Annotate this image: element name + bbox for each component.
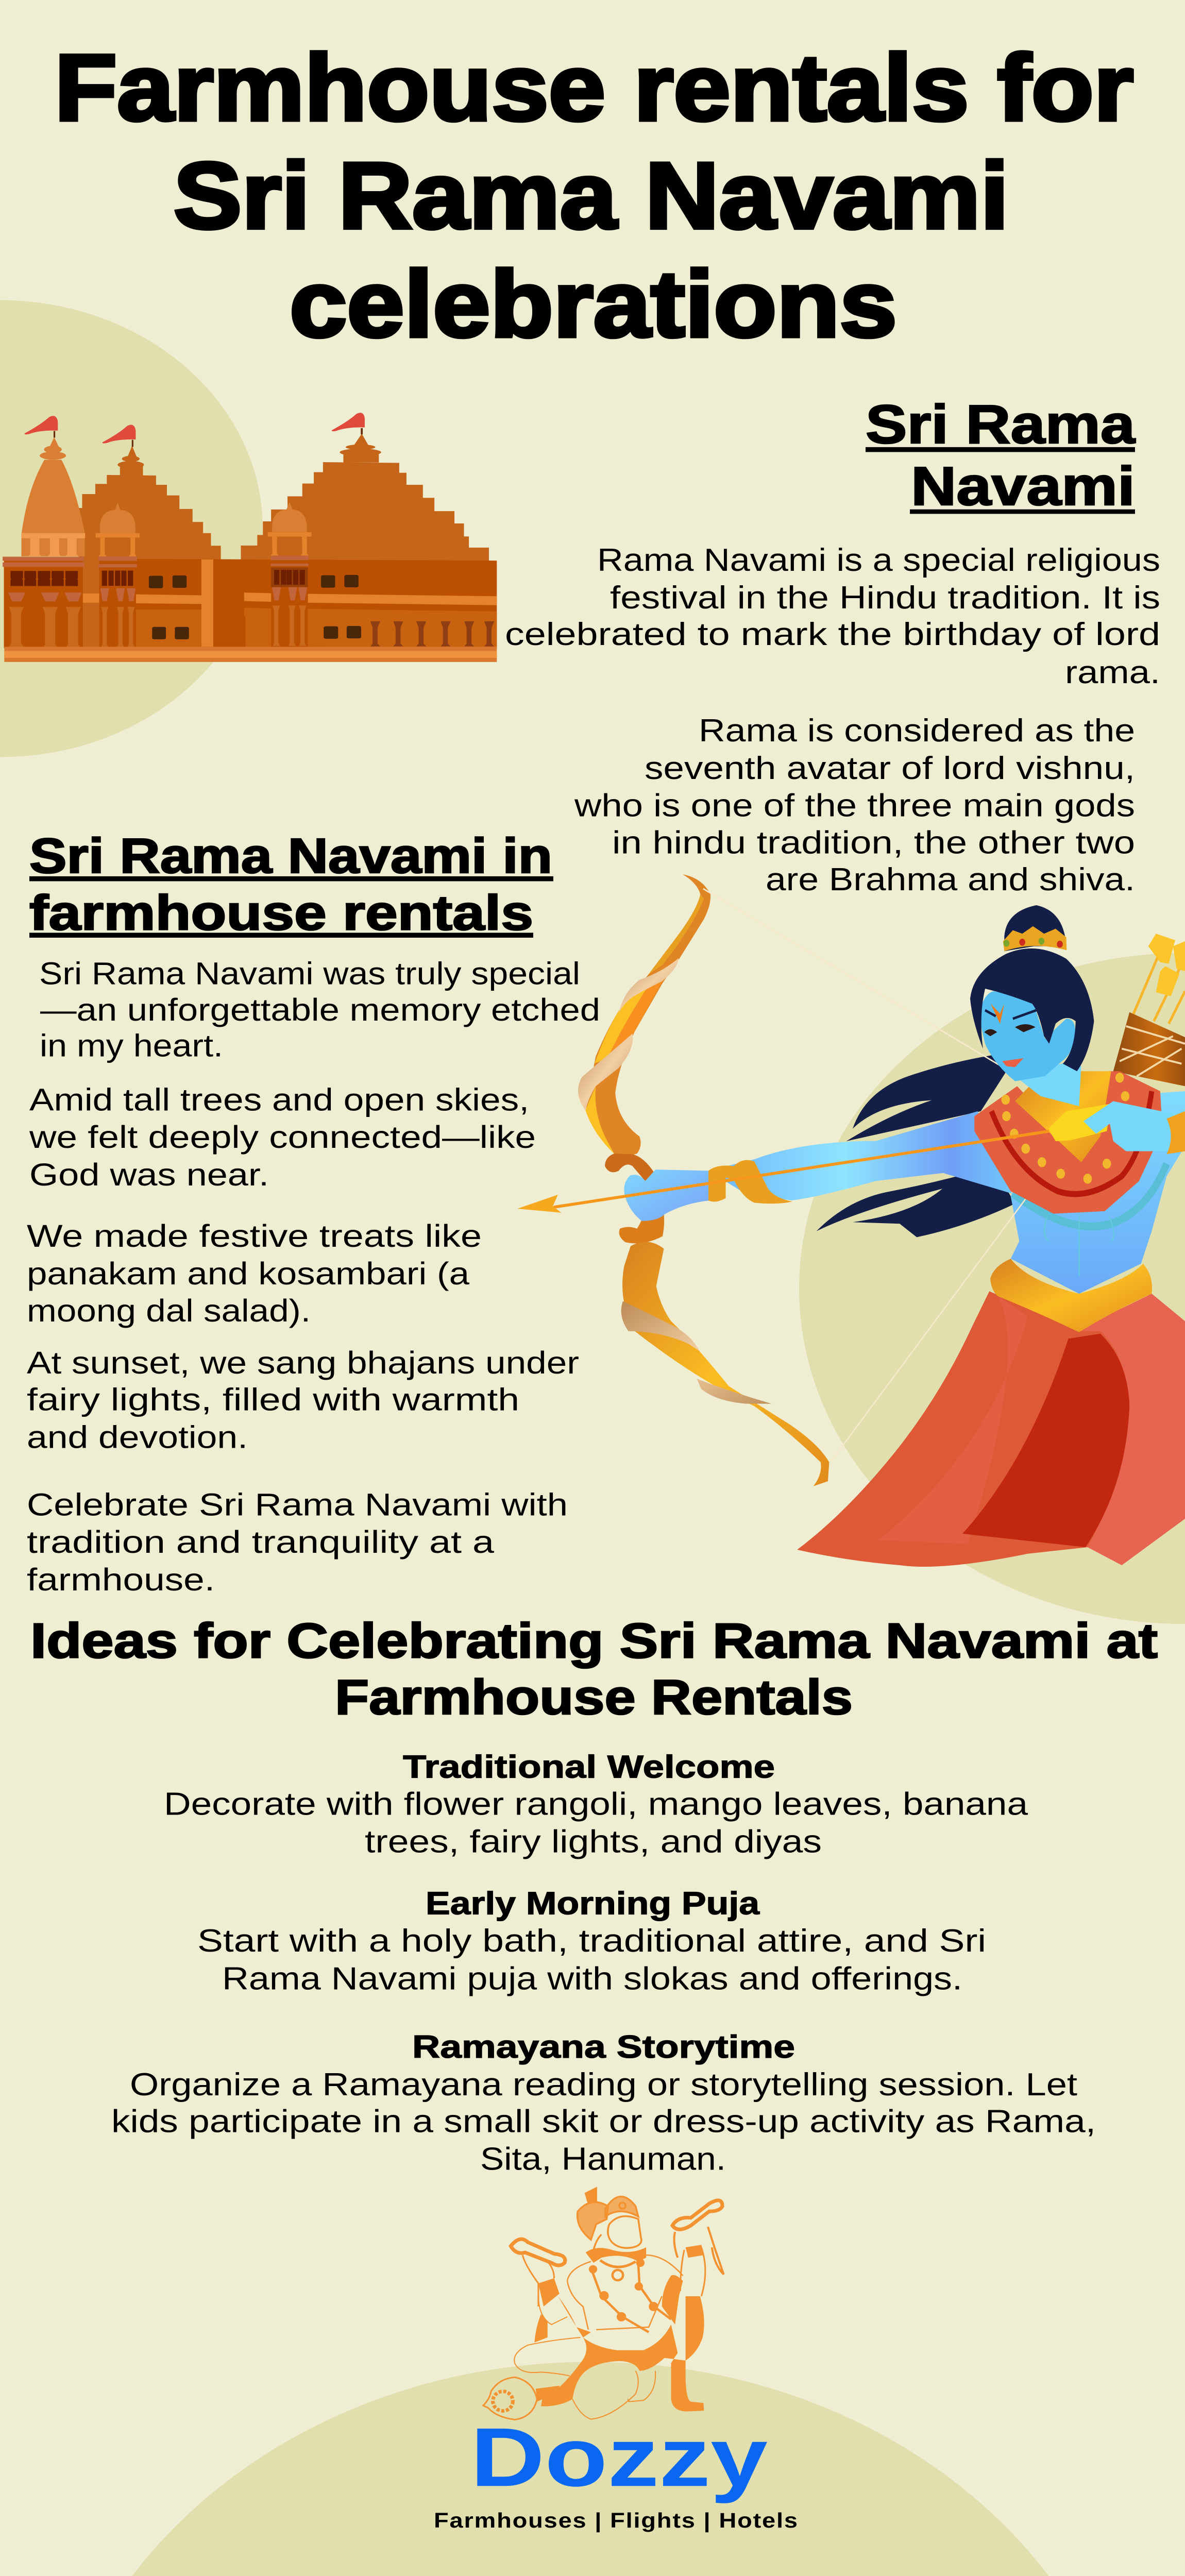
text block: celebrate with tradition bbox=[27, 1487, 568, 1597]
tagline: Farmhouses | Flights | Hotels bbox=[434, 2509, 798, 2533]
text block: Rama as avatar of Vishnu: in hindu tradition, the other two bbox=[612, 825, 1135, 860]
bow bbox=[578, 874, 829, 1486]
idea description: Decorate with flower rangoli, mango leaves, banana bbox=[164, 1786, 1028, 1822]
left shikhara dome bbox=[21, 437, 85, 556]
gada mace bbox=[483, 2377, 560, 2420]
idea: traditional welcome bbox=[164, 1749, 1028, 1860]
text block: bhajans at sunset bbox=[27, 1345, 579, 1454]
idea heading: Ramayana Storytime bbox=[412, 2029, 795, 2065]
idea heading: Early Morning Puja bbox=[426, 1886, 760, 1922]
text block: celebrate with tradition: tradition and tranquility at a bbox=[27, 1524, 495, 1560]
idea description: Organize a Ramayana reading or storytelling session. Let bbox=[130, 2066, 1077, 2103]
text block: festive treats bbox=[27, 1218, 482, 1328]
temple main building bbox=[3, 502, 497, 648]
text block: trees and skies: Amid tall trees and open skies, bbox=[29, 1082, 529, 1117]
text block: unforgettable memory bbox=[39, 956, 600, 1063]
text block: unforgettable memory: Sri Rama Navami was truly special bbox=[39, 956, 580, 991]
heading: Sri Rama Navami bbox=[866, 394, 1136, 517]
text block: Rama as avatar of Vishnu: are Brahma and shiva. bbox=[766, 861, 1135, 897]
upper bow limb bbox=[578, 874, 710, 1181]
skirt bbox=[797, 1291, 1185, 1567]
idea description: kids participate in a small skit or dress-up activity as Rama, bbox=[111, 2104, 1096, 2139]
text block: bhajans at sunset: fairy lights, filled with warmth bbox=[27, 1382, 519, 1417]
temple plinth bbox=[4, 647, 497, 662]
heading: Sri Rama Navami in farmhouse rentals: Sri Rama Navami in bbox=[29, 828, 552, 883]
illustration: Hanuman line art bbox=[483, 2188, 724, 2420]
idea heading: Traditional Welcome bbox=[403, 1749, 775, 1785]
text block: trees and skies bbox=[29, 1082, 536, 1192]
idea: early morning puja bbox=[197, 1886, 986, 1997]
text block: unforgettable memory: in my heart. bbox=[40, 1028, 223, 1063]
flags bbox=[25, 413, 365, 447]
pyramid spires bbox=[79, 434, 489, 564]
idea description: Start with a holy bath, traditional attire, and Sri bbox=[197, 1923, 986, 1959]
idea description: Rama Navami puja with slokas and offerings. bbox=[222, 1961, 962, 1997]
text block: about the festival: rama. bbox=[1065, 654, 1160, 690]
bow string bbox=[703, 889, 1073, 1464]
text block: about the festival bbox=[505, 542, 1160, 690]
text block: bhajans at sunset: and devotion. bbox=[27, 1420, 248, 1454]
garland flowers bbox=[589, 2259, 658, 2321]
heading: Sri Rama Navami in farmhouse rentals: farmhouse rentals bbox=[29, 885, 533, 940]
heading: Sri Rama Navami: Navami bbox=[911, 456, 1135, 517]
heading: ideas for celebrating bbox=[30, 1613, 1158, 1724]
text block: Rama as avatar of Vishnu: who is one of the three main gods bbox=[574, 788, 1135, 823]
title bbox=[55, 35, 1133, 357]
idea description: trees, fairy lights, and diyas bbox=[365, 1824, 822, 1860]
text block: unforgettable memory: —an unforgettable memory etched bbox=[40, 992, 600, 1027]
head and crown bbox=[578, 2188, 641, 2250]
heading: Sri Rama Navami: Sri Rama bbox=[866, 394, 1136, 455]
head with face bbox=[970, 905, 1094, 1106]
background hill: footer bbox=[132, 2362, 1049, 2576]
text block: trees and skies: we felt deeply connected—like bbox=[29, 1120, 536, 1155]
text block: festive treats: panakam and kosambari (a bbox=[27, 1256, 470, 1291]
thigh and foot outlines bbox=[514, 2295, 655, 2419]
title: Sri Rama Navami bbox=[174, 143, 1009, 248]
arrow bbox=[517, 1131, 1049, 1213]
text block: celebrate with tradition: Celebrate Sri Rama Navami with bbox=[27, 1487, 568, 1522]
extended arm and hand bbox=[624, 1111, 1012, 1221]
illustration: Lord Rama drawing a bow bbox=[517, 874, 1185, 1567]
heading: Sri Rama Navami in farmhouse rentals bbox=[29, 828, 553, 940]
solid orange garment and limbs bbox=[534, 2245, 704, 2412]
idea description bbox=[111, 2066, 1096, 2177]
text block: Rama as avatar of Vishnu: seventh avatar of lord vishnu, bbox=[645, 750, 1135, 786]
drawing hand, fletching and wristband bbox=[1048, 1101, 1185, 1154]
heading: ideas for celebrating: Farmhouse Rentals bbox=[335, 1670, 853, 1724]
idea description bbox=[197, 1923, 986, 1997]
flowing hair bbox=[817, 1051, 1019, 1237]
idea description bbox=[164, 1786, 1028, 1860]
text block: festive treats: We made festive treats like bbox=[27, 1218, 482, 1253]
rama torso bbox=[1011, 1091, 1185, 1294]
illustration: Ram temple with flags bbox=[3, 413, 497, 662]
golden belt bbox=[990, 1259, 1152, 1332]
text block: Rama as avatar of Vishnu: Rama is considered as the bbox=[699, 713, 1135, 749]
raised arms holding cymbals bbox=[511, 2200, 724, 2307]
logo: Dozzy: Dozzy bbox=[470, 2411, 768, 2504]
heading: ideas for celebrating: Ideas for Celebrating Sri Rama Navami at bbox=[30, 1613, 1158, 1668]
background circle: top left bbox=[0, 300, 263, 757]
quiver with arrows bbox=[1113, 934, 1185, 1086]
text block: Rama as avatar of Vishnu bbox=[574, 713, 1135, 897]
text block: trees and skies: God was near. bbox=[29, 1157, 269, 1192]
idea: ramayana storytime bbox=[111, 2029, 1096, 2177]
title: celebrations bbox=[290, 251, 897, 357]
torso, garland and necklace bbox=[567, 2255, 683, 2332]
necklace collar bbox=[974, 1071, 1162, 1214]
background circle: right behind archer bbox=[799, 953, 1185, 1624]
title: Farmhouse rentals for bbox=[55, 35, 1133, 140]
idea description: Sita, Hanuman. bbox=[480, 2141, 726, 2177]
text block: about the festival: Rama Navami is a special religious bbox=[597, 542, 1160, 578]
text block: about the festival: celebrated to mark the birthday of lord bbox=[505, 616, 1160, 652]
text block: festive treats: moong dal salad). bbox=[27, 1293, 311, 1328]
text block: about the festival: festival in the Hindu tradition. It is bbox=[610, 580, 1160, 616]
text block: celebrate with tradition: farmhouse. bbox=[27, 1562, 215, 1597]
text block: bhajans at sunset: At sunset, we sang bhajans under bbox=[27, 1345, 579, 1380]
